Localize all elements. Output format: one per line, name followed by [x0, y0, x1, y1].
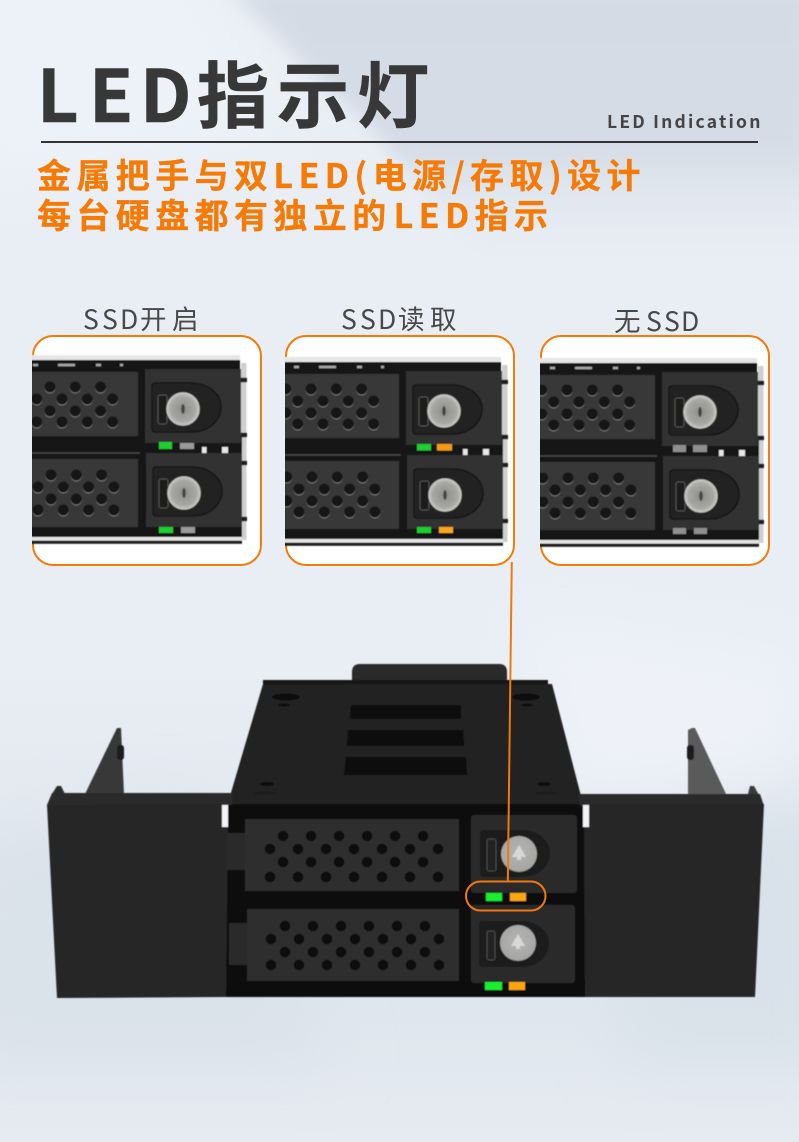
label: SSD on: SSD开启 — [83, 298, 198, 337]
label: SSD read: SSD读取 — [341, 298, 456, 337]
right bracket — [578, 794, 764, 997]
top plate with slots — [230, 680, 581, 808]
orange description: 每台硬盘都有独立的LED指示 — [37, 189, 553, 238]
upper drive handle — [471, 815, 577, 893]
product: drive bay enclosure — [47, 664, 764, 998]
rear wings and pegs — [52, 728, 760, 797]
english subtitle: LED Indication — [607, 109, 763, 134]
lower drive handle — [471, 905, 575, 983]
central bay — [226, 804, 586, 997]
rear handle tab — [352, 664, 507, 684]
orange description — [37, 149, 646, 238]
orange description: 金属把手与双LED(电源/存取)设计 — [37, 149, 646, 198]
LEDs: green on — [159, 442, 195, 533]
label: no SSD: 无SSD — [614, 300, 699, 339]
callout ring around LEDs — [466, 882, 546, 910]
LEDs: off — [673, 445, 707, 534]
LEDs: green and orange on — [417, 444, 453, 533]
LEDs lower — [485, 982, 525, 990]
panel: no SSD — [540, 310, 770, 566]
drive tray panels — [227, 819, 459, 981]
LEDs upper — [486, 893, 526, 901]
callout leader line — [508, 562, 512, 882]
title divider rule — [41, 141, 758, 143]
panel: SSD read — [285, 306, 515, 566]
panel: SSD on — [32, 306, 262, 566]
left bracket — [47, 793, 232, 998]
title: LED指示灯 — [37, 38, 429, 143]
